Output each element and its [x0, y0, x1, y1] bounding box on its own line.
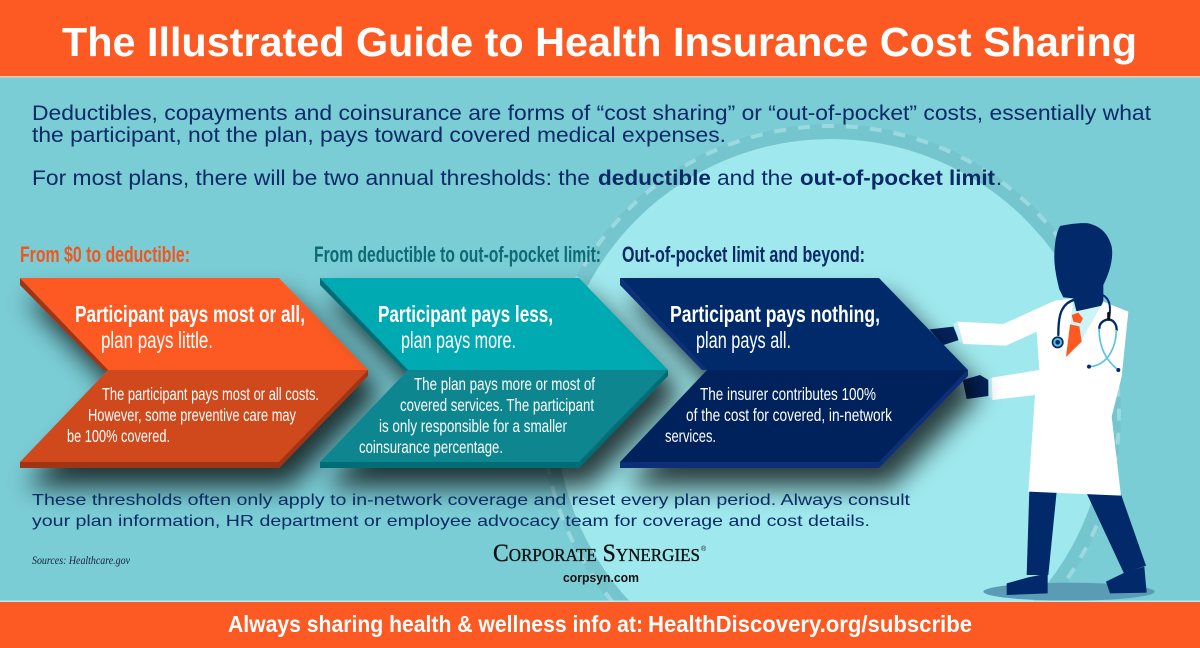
header band: [0, 0, 1200, 78]
panel: from $0 to deductible: [20, 242, 368, 468]
shoes: [1007, 567, 1147, 595]
intro text: and the: [717, 167, 793, 190]
stethoscope: [1052, 295, 1120, 372]
stage label: Out-of-pocket limit and beyond:: [622, 242, 865, 267]
panel: out-of-pocket limit and beyond: plan pays all.: [696, 327, 791, 353]
doctor illustration: [929, 223, 1155, 601]
headline: Participant pays most or all,: [75, 301, 305, 327]
ground shadow: [983, 583, 1155, 601]
panel: from $0 to deductible: plan pays little.: [101, 327, 213, 353]
chevron arrow: [20, 278, 368, 468]
chevron arrow: [320, 278, 668, 468]
panel: from $0 to deductible: However, some preventive care may: [88, 405, 296, 425]
lab coat: [957, 299, 1128, 496]
panel: out-of-pocket limit and beyond: of the cost for covered, in-network: [686, 405, 892, 425]
intro text: For most plans, there will be two annual thresholds: the: [32, 167, 590, 190]
panel: out-of-pocket limit and beyond: services.: [665, 426, 716, 446]
footer band: [0, 600, 1200, 648]
logo: ®: [701, 545, 707, 553]
intro text: [32, 102, 1151, 190]
intro text: out-of-pocket limit: [800, 167, 995, 190]
panel: from $0 to deductible: be 100% covered.: [67, 426, 170, 446]
intro text: deductible: [598, 167, 711, 190]
title: The Illustrated Guide to Health Insurance Cost Sharing: [62, 19, 1137, 65]
headline: Participant pays nothing,: [670, 301, 880, 327]
trousers: [1027, 490, 1146, 575]
intro text: Deductibles, copayments and coinsurance are forms of “cost sharing” or “out-of-pocket” costs, essentially what: [32, 102, 1151, 125]
sources: Sources: Healthcare.gov: [32, 555, 131, 567]
headline: Participant pays less,: [378, 301, 553, 327]
panel: deductible to out-of-pocket limit: covered services. The participant: [400, 395, 594, 415]
chevron arrow: [620, 278, 968, 468]
panel: deductible to out-of-pocket limit: coinsurance percentage.: [359, 437, 503, 457]
hands: [929, 327, 988, 399]
stage label: From deductible to out-of-pocket limit:: [314, 242, 601, 267]
panel: deductible to out-of-pocket limit: plan pays more.: [401, 327, 516, 353]
description: The participant pays most or all costs.: [102, 384, 319, 404]
tie: [1066, 313, 1083, 357]
head: [1054, 223, 1112, 312]
footnote text: [32, 492, 911, 530]
intro text: the participant, not the plan, pays toward covered medical expenses.: [32, 124, 726, 147]
footer call to action: Always sharing health & wellness info at:: [228, 611, 643, 637]
cuffs: [953, 322, 992, 399]
stage label: From $0 to deductible:: [20, 242, 190, 267]
decorative circle with dashed ring: [541, 124, 1121, 602]
footnote text: These thresholds often only apply to in-network coverage and reset every plan period. Always consult: [32, 492, 911, 509]
description: The insurer contributes 100%: [700, 384, 876, 404]
intro text: .: [996, 167, 1002, 190]
footer band: HealthDiscovery.org/subscribe: [648, 611, 972, 637]
logo: [493, 540, 707, 585]
panel: deductible to out-of-pocket limit: is only responsible for a smaller: [379, 416, 567, 436]
logo: Corporate Synergies: [493, 540, 700, 567]
description: The plan pays more or most of: [414, 374, 595, 394]
collar: [1067, 302, 1103, 357]
panel: deductible to out-of-pocket limit: [314, 242, 668, 468]
panel: out-of-pocket limit and beyond: [620, 242, 968, 468]
logo: corpsyn.com: [563, 571, 639, 585]
footnote text: your plan information, HR department or employee advocacy team for coverage and cost details.: [32, 513, 870, 530]
